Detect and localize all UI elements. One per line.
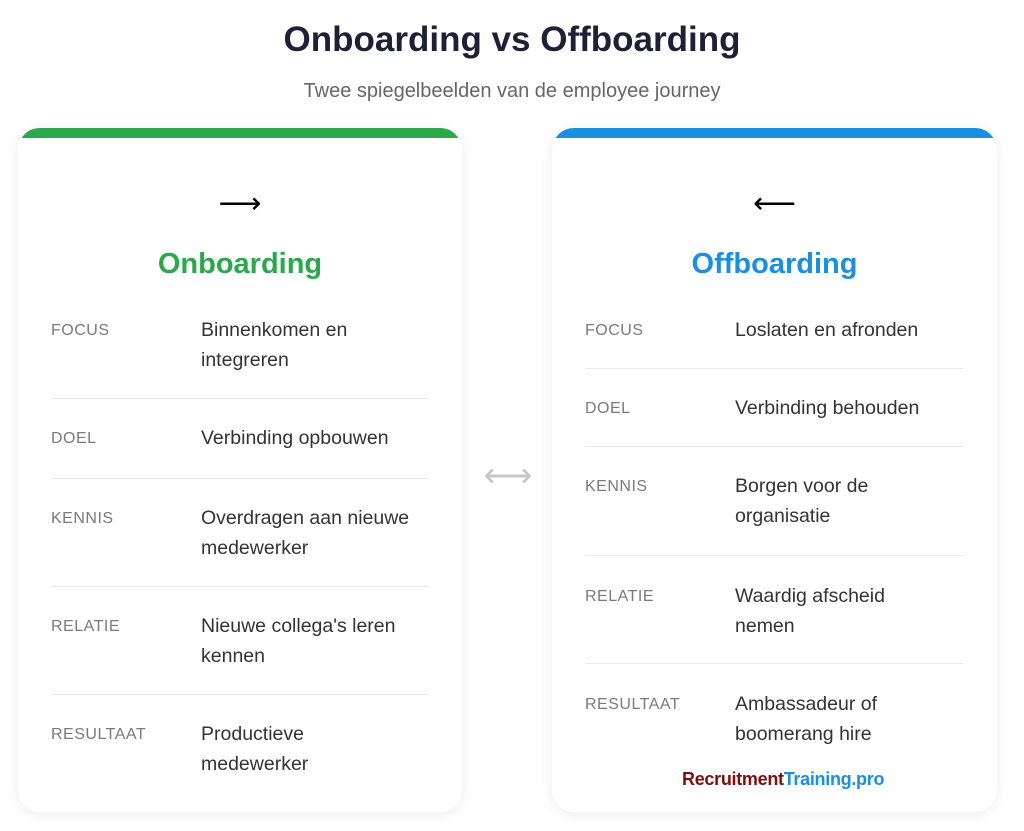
row: kennis: Overdragen aan nieuwe <box>201 507 409 529</box>
title: Onboarding vs Offboarding <box>284 20 740 59</box>
row: resultaat: Ambassadeur of <box>735 693 877 715</box>
row: focus: FOCUS <box>51 322 110 339</box>
row: kennis: medewerker <box>201 537 308 559</box>
row: focus: FOCUS <box>585 322 644 339</box>
row: doel: DOEL <box>585 400 631 417</box>
row: resultaat <box>51 723 308 775</box>
heading: offboarding: Offboarding <box>692 248 857 280</box>
row: kennis: KENNIS <box>51 510 114 527</box>
row: resultaat: Productieve <box>201 723 304 745</box>
row: resultaat: RESULTAAT <box>585 696 680 713</box>
row: relatie: nemen <box>735 615 795 637</box>
row: relatie: Nieuwe collega's leren <box>201 615 396 637</box>
row: kennis: organisatie <box>735 505 830 527</box>
row: focus: integreren <box>201 349 289 371</box>
row: resultaat: RESULTAAT <box>51 726 146 743</box>
row: relatie: RELATIE <box>51 618 120 635</box>
row: doel: Verbinding behouden <box>735 397 919 419</box>
logo: RecruitmentTraining.pro <box>682 769 884 789</box>
row: doel <box>51 427 389 449</box>
row: doel <box>585 397 919 419</box>
row: kennis: Borgen voor de <box>735 475 868 497</box>
row: kennis <box>51 507 409 559</box>
icon: double arrow: ⟷ <box>484 457 532 495</box>
row: doel: Verbinding opbouwen <box>201 427 389 449</box>
subtitle: Twee spiegelbeelden van de employee journey <box>304 80 720 102</box>
heading: onboarding: Onboarding <box>158 248 322 280</box>
row: relatie: kennen <box>201 645 265 667</box>
row: kennis: KENNIS <box>585 478 648 495</box>
row: resultaat <box>585 693 878 745</box>
panel: onboarding <box>18 128 462 812</box>
row: focus: Loslaten en afronden <box>735 319 918 341</box>
icon: left arrow: ⟵ <box>753 187 796 220</box>
row: relatie: RELATIE <box>585 588 654 605</box>
panel: offboarding <box>552 128 997 812</box>
row: relatie <box>585 585 885 637</box>
row: doel: DOEL <box>51 430 97 447</box>
row: focus <box>51 319 347 371</box>
row: relatie: Waardig afscheid <box>735 585 885 607</box>
row: resultaat: medewerker <box>201 753 308 775</box>
row: focus <box>585 319 918 341</box>
row: resultaat: boomerang hire <box>735 723 872 745</box>
row: focus: Binnenkomen en <box>201 319 347 341</box>
row: kennis <box>585 475 868 527</box>
row: relatie <box>51 615 396 667</box>
icon: right arrow: ⟶ <box>218 187 262 220</box>
